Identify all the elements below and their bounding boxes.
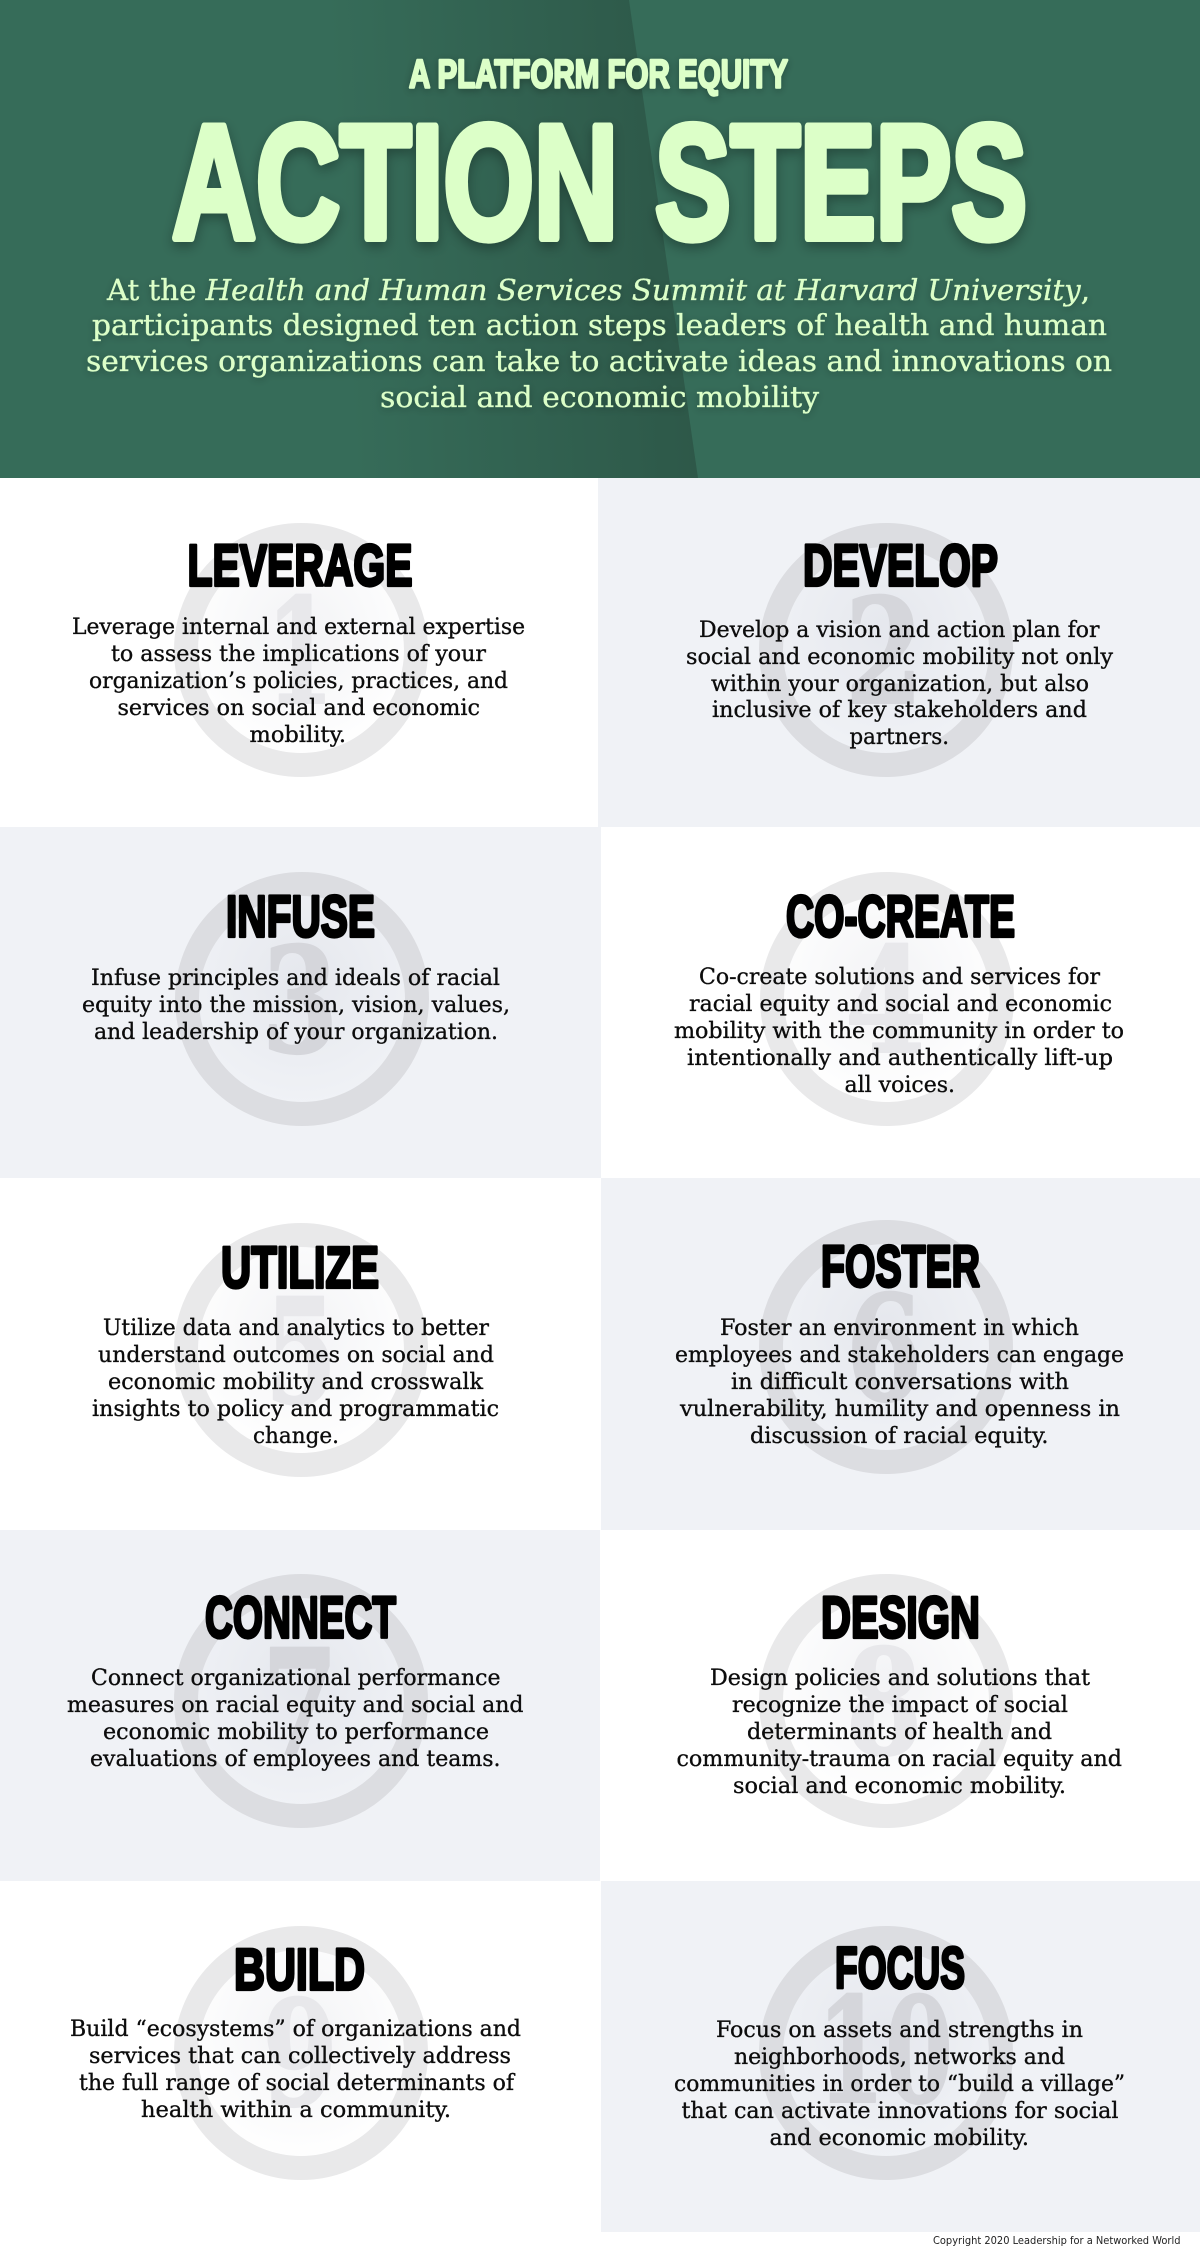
panel: step 2 develop: 2 <box>845 567 923 738</box>
description: neighborhoods, networks and <box>734 2045 1065 2070</box>
description: economic mobility and crosswalk <box>108 1370 484 1395</box>
heading: DESIGN <box>821 1586 980 1650</box>
description: to assess the implications of your <box>111 642 487 667</box>
description <box>72 615 525 748</box>
panel: step 8 design <box>600 1530 1200 1881</box>
description <box>674 2018 1125 2151</box>
heading: BUILD <box>234 1938 365 2002</box>
panel: step 9 build: 9 <box>262 1969 338 2140</box>
panel: step 2 develop <box>598 478 1200 827</box>
panel: step 1 leverage <box>0 478 598 827</box>
description: Design policies and solutions that <box>710 1666 1090 1691</box>
description: discussion of racial equity. <box>750 1424 1048 1449</box>
panel: step 8 design: 8 <box>846 1618 922 1789</box>
panel: step 3 infuse <box>0 827 601 1178</box>
panel: header <box>0 0 1200 478</box>
description: Foster an environment in which <box>720 1316 1079 1341</box>
description: mobility. <box>250 723 346 748</box>
title: STEPS <box>655 92 1027 273</box>
description: Co-create solutions and services for <box>699 965 1101 990</box>
description: Build “ecosystems” of organizations and <box>70 2017 521 2042</box>
panel: step 6 foster <box>601 1178 1200 1530</box>
description: services on social and economic <box>118 696 480 721</box>
heading: CO-CREATE <box>786 884 1015 950</box>
heading: CONNECT <box>205 1586 396 1650</box>
description <box>67 1666 524 1772</box>
description <box>82 966 510 1045</box>
description: communities in order to “build a village” <box>674 2072 1125 2097</box>
description: vulnerability, humility and openness in <box>679 1397 1120 1422</box>
description: mobility with the community in order to <box>674 1019 1124 1044</box>
heading: DEVELOP <box>803 534 998 598</box>
intro text <box>86 273 1112 414</box>
description: health within a community. <box>141 2098 451 2123</box>
panel: step 4 co-create: 4 <box>845 916 927 1087</box>
panel: step 1 leverage: 1 <box>266 567 334 738</box>
description: change. <box>253 1424 339 1449</box>
panel: step 10 focus <box>601 1881 1200 2232</box>
description: Leverage internal and external expertise <box>72 615 525 640</box>
description: community-trauma on racial equity and <box>676 1747 1122 1772</box>
description <box>686 618 1114 750</box>
panel: step 5 utilize <box>0 1178 601 1530</box>
panel: step 4 co-create <box>601 827 1200 1178</box>
description <box>674 965 1124 1098</box>
description: services that can collectively address <box>89 2044 511 2069</box>
description: recognize the impact of social <box>732 1693 1068 1718</box>
description: and economic mobility. <box>770 2126 1029 2151</box>
heading: FOSTER <box>821 1234 980 1300</box>
description: understand outcomes on social and <box>98 1343 494 1368</box>
description: equity into the mission, vision, values, <box>82 993 510 1018</box>
description: partners. <box>850 725 949 750</box>
heading: UTILIZE <box>221 1236 379 1300</box>
panel: step 3 infuse: 3 <box>262 916 338 1087</box>
heading: FOCUS <box>835 1936 965 2001</box>
description: inclusive of key stakeholders and <box>712 698 1087 723</box>
description: evaluations of employees and teams. <box>90 1747 500 1772</box>
intro text: At the Health and Human Services Summit at Harvard University , <box>106 273 1090 307</box>
description: measures on racial equity and social and <box>67 1693 524 1718</box>
description: insights to policy and programmatic <box>92 1397 499 1422</box>
description <box>70 2017 521 2123</box>
copyright: Copyright 2020 Leadership for a Networked World <box>933 2235 1180 2247</box>
intro text: social and economic mobility <box>380 380 819 414</box>
description: racial equity and social and economic <box>689 992 1112 1017</box>
description: organization’s policies, practices, and <box>89 669 508 694</box>
description: employees and stakeholders can engage <box>675 1343 1124 1368</box>
subtitle: A PLATFORM FOR EQUITY <box>409 52 788 96</box>
description: that can activate innovations for social <box>682 2099 1118 2124</box>
panel: step 7 connect: 7 <box>262 1618 338 1789</box>
description: economic mobility to performance <box>103 1720 489 1745</box>
description: all voices. <box>844 1073 955 1098</box>
description: Connect organizational performance <box>91 1666 500 1691</box>
heading: INFUSE <box>226 884 375 950</box>
panel: step 9 build <box>0 1881 601 2250</box>
description: Focus on assets and strengths in <box>716 2018 1083 2043</box>
intro text: services organizations can take to activate ideas and innovations on <box>86 344 1112 378</box>
description: Infuse principles and ideals of racial <box>91 966 500 991</box>
title: ACTION <box>172 92 618 273</box>
description <box>676 1666 1122 1799</box>
panel: step 6 foster: 6 <box>846 1264 922 1435</box>
heading: LEVERAGE <box>188 534 412 598</box>
description: within your organization, but also <box>711 672 1089 697</box>
description: social and economic mobility not only <box>686 645 1114 670</box>
description: the full range of social determinants of <box>79 2071 516 2096</box>
description <box>92 1316 499 1449</box>
description: determinants of health and <box>747 1720 1052 1745</box>
description <box>675 1316 1124 1449</box>
intro text: participants designed ten action steps leaders of health and human <box>92 308 1107 342</box>
panel: step 5 utilize: 5 <box>265 1267 337 1438</box>
panel: step 10 focus: 10 <box>817 1966 953 2137</box>
description: in difficult conversations with <box>731 1370 1069 1395</box>
description: Develop a vision and action plan for <box>699 618 1100 643</box>
description: and leadership of your organization. <box>94 1020 498 1045</box>
description: social and economic mobility. <box>733 1774 1066 1799</box>
description: intentionally and authentically lift-up <box>687 1046 1113 1071</box>
description: Utilize data and analytics to better <box>103 1316 490 1341</box>
panel: step 7 connect <box>0 1530 600 1881</box>
